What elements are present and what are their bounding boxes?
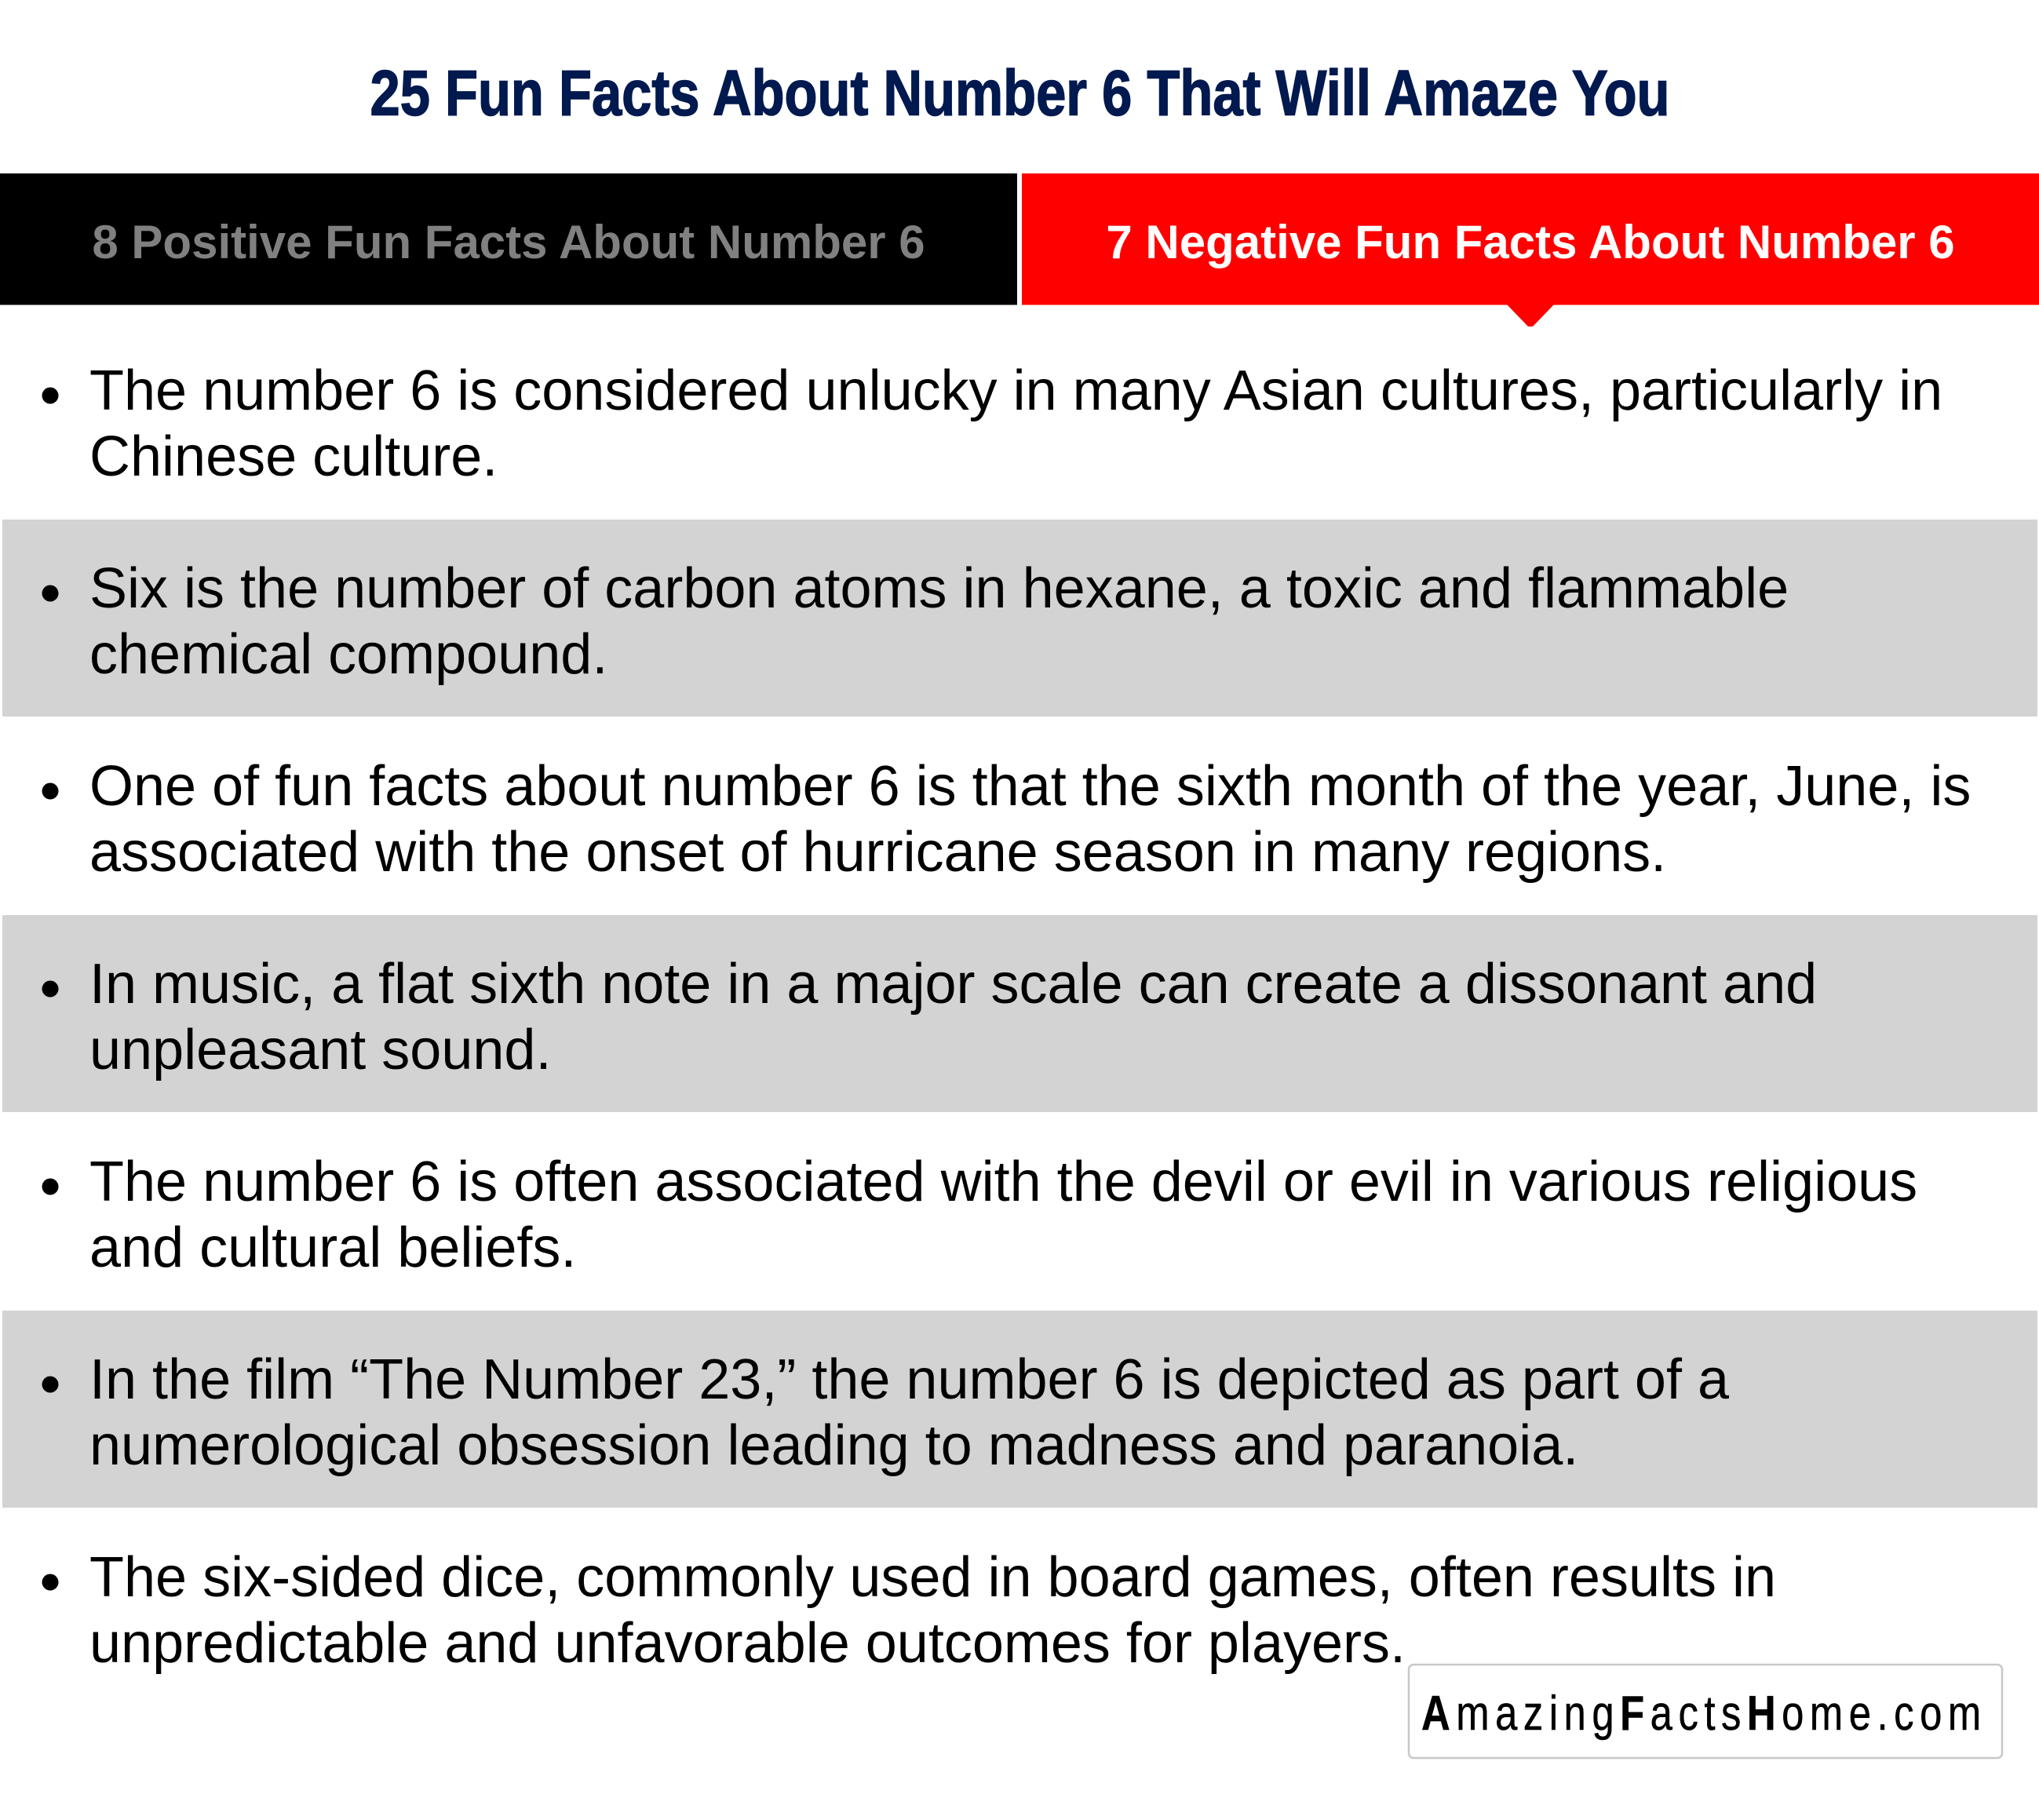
bullet 7 [42,1574,58,1590]
fact 4 row [2,915,2037,1112]
fact 2 text: chemical compound. [89,623,607,686]
fact 3 [42,755,1971,884]
fact 7 [42,1546,1776,1675]
fact 6 text: In the film “The Number 23,” the number 6 is depicted as part of a [89,1348,1730,1411]
bullet 6 [42,1377,58,1392]
fact 2 row [2,520,2037,717]
fact 1 text [89,359,1942,488]
fact 6 row [2,1311,2037,1508]
fact 4 text: unpleasant sound. [89,1019,551,1081]
fact 2 text [89,557,1789,686]
bullet 3 [42,783,58,799]
fact 1 [42,359,1942,488]
tab: negative fun facts (active) [1022,173,2039,326]
fact 3 text [89,755,1971,884]
fact 5 text: The number 6 is often associated with the devil or evil in various religious [89,1151,1917,1213]
fact 2 text: Six is the number of carbon atoms in hexane, a toxic and flammable [89,557,1789,620]
tab label: negative: 7 Negative Fun Facts About Number 6 [1106,216,1955,268]
fact 3 text: One of fun facts about number 6 is that the sixth month of the year, June, is [89,755,1971,818]
fact 4 text [89,953,1817,1081]
bullet 1 [42,388,58,403]
bullet 2 [42,585,58,601]
fact 6 text [89,1348,1730,1477]
fact 7 text: The six-sided dice, commonly used in board games, often results in [89,1546,1776,1609]
watermark badge [1409,1665,2002,1758]
fact 1 text: Chinese culture. [89,425,498,488]
icon: active tab pointer [1507,305,1554,326]
fact 5 text [89,1151,1917,1279]
fact 5 [42,1151,1917,1279]
fact 3 text: associated with the onset of hurricane season in many regions. [89,821,1666,884]
fact 1 text: The number 6 is considered unlucky in many Asian cultures, particularly in [89,359,1942,422]
fact 4 text: In music, a flat sixth note in a major scale can create a dissonant and [89,953,1817,1016]
fact 5 text: and cultural beliefs. [89,1216,576,1279]
fact 7 text [89,1546,1776,1675]
tab label: positive: 8 Positive Fun Facts About Number 6 [92,216,925,268]
fact 6 text: numerological obsession leading to madness and paranoia. [89,1414,1578,1477]
watermark text: AmazingFactsHome.com [1421,1687,1987,1741]
tab: positive fun facts [0,173,1017,305]
bullet 4 [42,981,58,997]
title: 25 Fun Facts About Number 6 That Will Amaze You [370,58,1670,129]
fact 7 text: unpredictable and unfavorable outcomes for players. [89,1612,1406,1675]
bullet 5 [42,1179,58,1194]
